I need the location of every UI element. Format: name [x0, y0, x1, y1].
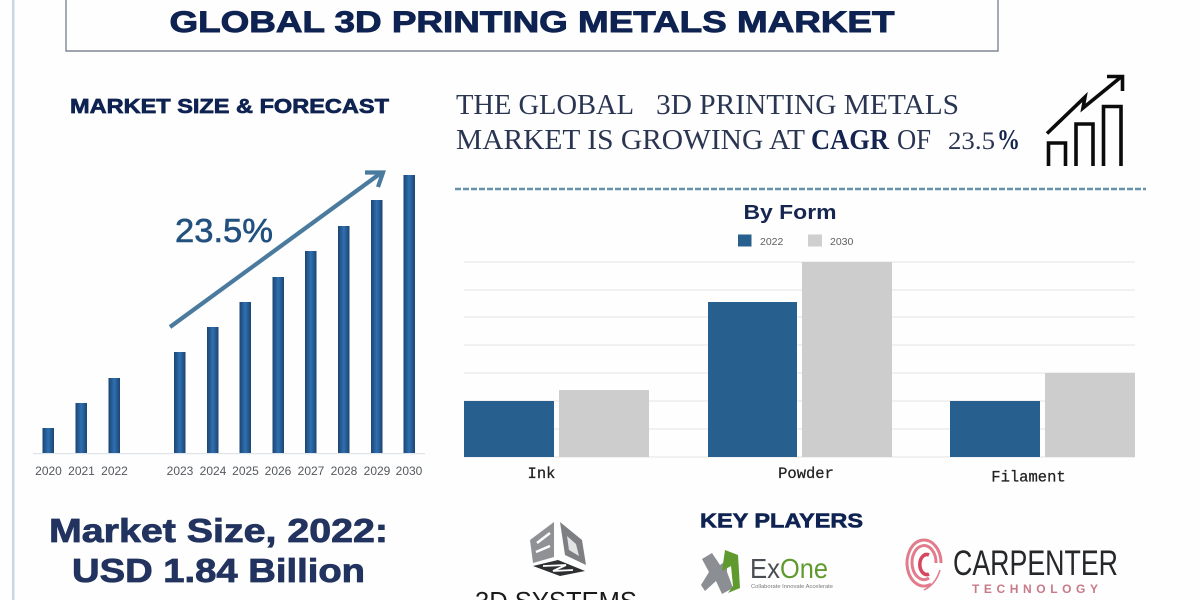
series 2030: [559, 262, 1135, 457]
bar chart: market size by year: [33, 175, 425, 478]
CAGR statement: [456, 89, 1020, 156]
category labels: Powder: [778, 465, 834, 483]
label: 23.5 percent: 23.5%: [175, 212, 273, 249]
series 2022: [464, 302, 1040, 457]
icon: rising bar chart with arrow: [1047, 76, 1122, 166]
legend: [738, 234, 854, 248]
year labels: 2026: [265, 464, 292, 478]
CAGR statement: THE GLOBAL: [456, 89, 634, 121]
legend: 2030: [830, 236, 854, 248]
S face: [533, 560, 585, 576]
year labels: 2027: [298, 464, 325, 478]
year labels: 2022: [101, 464, 128, 478]
chart heading: by form: By Form: [744, 202, 836, 224]
category labels: Ink: [528, 465, 555, 483]
year labels: [35, 464, 423, 478]
logo: ExOne: One: [780, 553, 828, 584]
year labels: 2029: [364, 464, 391, 478]
D face: [560, 522, 586, 565]
year labels: 2025: [232, 464, 259, 478]
arrow: growth trend: [170, 172, 383, 327]
year labels: 2020: [35, 464, 62, 478]
CAGR statement: 23.5: [948, 128, 995, 155]
dashed divider: [455, 188, 1146, 190]
legend: 2022: [760, 236, 784, 248]
CAGR statement: CAGR: [811, 124, 890, 156]
CAGR statement: %: [997, 124, 1020, 156]
market size callout: [49, 512, 388, 589]
year labels: 2021: [68, 464, 95, 478]
title: GLOBAL 3D PRINTING METALS MARKET: [170, 6, 894, 39]
year labels: 2024: [200, 464, 227, 478]
heading: key players: KEY PLAYERS: [700, 510, 863, 532]
CAGR statement: MARKET IS GROWING AT: [456, 124, 805, 156]
logo: Carpenter Technology: TECHNOLOGY: [972, 582, 1098, 596]
year labels: 2028: [331, 464, 358, 478]
market size callout: Market Size, 2022:: [49, 512, 388, 549]
heading: market size and forecast: MARKET SIZE & FORECAST: [70, 96, 389, 118]
logo: Carpenter Technology: [907, 540, 1118, 596]
category labels: [528, 465, 1066, 486]
category labels: Filament: [991, 468, 1066, 486]
logo: ExOne: [701, 550, 833, 594]
logo: ExOne: Ex: [750, 553, 780, 584]
3 face: [530, 522, 554, 563]
market size callout: USD 1.84 Billion: [72, 552, 365, 589]
logo: Carpenter Technology: CARPENTER: [953, 544, 1118, 583]
logo: 3D Systems: [475, 522, 637, 600]
title: [66, 0, 998, 51]
CAGR statement: 3D PRINTING METALS: [656, 89, 959, 121]
bar chart: by form: [464, 262, 1135, 486]
logo: ExOne: Collaborate Innovate Accelerate: [751, 584, 833, 590]
year labels: 2030: [396, 464, 423, 478]
year labels: 2023: [167, 464, 194, 478]
CAGR statement: OF: [897, 124, 931, 156]
